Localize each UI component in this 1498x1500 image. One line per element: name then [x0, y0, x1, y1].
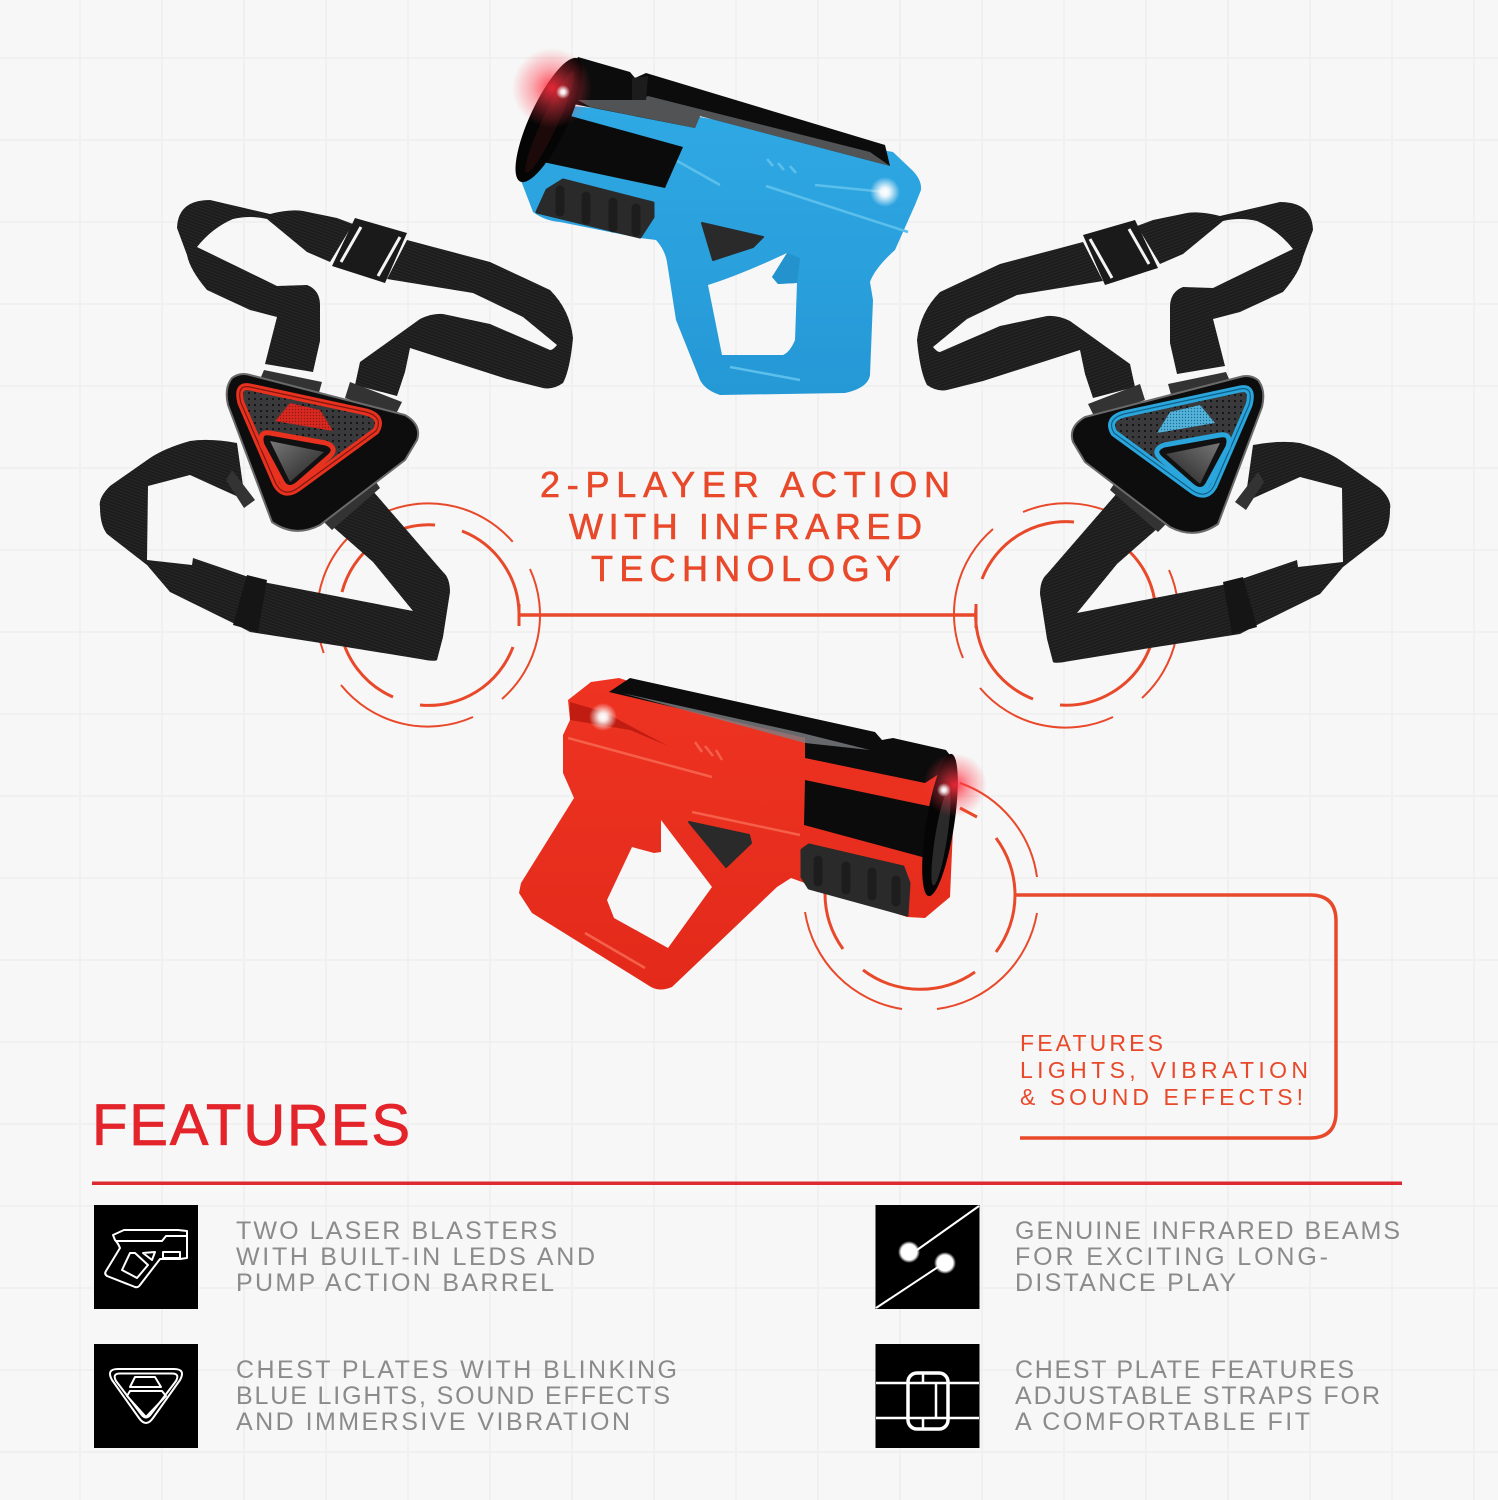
icon: chest plate — [94, 1344, 198, 1448]
right harness buckle — [1083, 220, 1158, 285]
blue LED glow — [870, 177, 900, 207]
headline: WITH INFRARED — [569, 506, 922, 547]
red laser blaster — [519, 678, 987, 990]
left plate grille — [275, 403, 333, 431]
feature 3 text — [1015, 1217, 1400, 1297]
left plate red ring — [240, 387, 378, 492]
feature 2 text: AND IMMERSIVE VIBRATION — [236, 1408, 630, 1436]
red gun shadow slot — [570, 702, 668, 746]
left harness buckle — [332, 218, 407, 283]
left plate button — [261, 433, 333, 488]
feature 2 text: BLUE LIGHTS, SOUND EFFECTS — [236, 1382, 670, 1410]
red gun top barrel — [609, 678, 956, 783]
left harness connectors — [226, 370, 402, 530]
right target rings — [954, 503, 1179, 728]
features divider — [92, 1182, 1402, 1185]
right chest harness (blue) — [917, 202, 1390, 663]
feature 3 text: GENUINE INFRARED BEAMS — [1015, 1217, 1400, 1245]
blue gun side button — [702, 223, 763, 260]
feature 4 text: A COMFORTABLE FIT — [1015, 1408, 1310, 1436]
left chest plate body — [227, 374, 418, 531]
blue laser blaster — [503, 48, 921, 395]
blue gun body — [520, 105, 921, 395]
callout text: LIGHTS, VIBRATION — [1020, 1057, 1308, 1083]
icon: blaster — [94, 1205, 198, 1309]
callout text — [1020, 1030, 1308, 1110]
gun target rings — [805, 783, 1037, 1009]
feature 4 text: CHEST PLATE FEATURES — [1015, 1356, 1354, 1384]
feature 2 text — [236, 1356, 677, 1436]
features heading: FEATURES — [92, 1093, 410, 1158]
callout text: & SOUND EFFECTS! — [1020, 1084, 1303, 1110]
feature 4 text: ADJUSTABLE STRAPS FOR — [1015, 1382, 1380, 1410]
headline: TECHNOLOGY — [591, 548, 900, 589]
feature 4 text — [1015, 1356, 1380, 1436]
red gun window — [804, 780, 933, 858]
red gun muzzle — [915, 752, 965, 898]
feature 1 text: WITH BUILT-IN LEDS AND — [236, 1243, 595, 1271]
connector line between harness rings — [519, 604, 976, 628]
feature 4 — [876, 1344, 1380, 1448]
red gun side button — [689, 822, 751, 867]
feature 1 — [94, 1205, 595, 1309]
red gun LED glow — [589, 703, 617, 731]
right harness slider — [1223, 577, 1257, 634]
feature 3 text: DISTANCE PLAY — [1015, 1269, 1236, 1297]
left harness slider — [233, 575, 267, 632]
headline — [540, 464, 950, 589]
feature 1 text: PUMP ACTION BARREL — [236, 1269, 554, 1297]
callout leader line — [1015, 895, 1336, 1138]
feature 2 text: CHEST PLATES WITH BLINKING — [236, 1356, 677, 1384]
left target rings — [317, 503, 540, 727]
blue gun muzzle — [503, 50, 595, 190]
feature 1 text — [236, 1217, 595, 1297]
right plate grille — [1157, 405, 1215, 433]
blue gun trigger shade — [772, 253, 800, 284]
right plate button — [1157, 435, 1229, 490]
icon: adjustable strap — [876, 1344, 980, 1448]
icon: infrared beams — [876, 1205, 980, 1309]
left harness straps — [100, 200, 573, 661]
right plate blue ring — [1112, 389, 1250, 494]
left chest harness (red) — [100, 200, 573, 661]
right harness straps — [917, 202, 1390, 663]
feature 1 text: TWO LASER BLASTERS — [236, 1217, 557, 1245]
right harness connectors — [1088, 372, 1264, 532]
headline: 2-PLAYER ACTION — [540, 464, 950, 505]
blue gun pump grip — [537, 180, 653, 237]
feature 2 — [94, 1344, 677, 1448]
feature 3 text: FOR EXCITING LONG- — [1015, 1243, 1328, 1271]
blue gun window — [543, 115, 683, 188]
muzzle red glow — [923, 753, 987, 817]
red gun body — [519, 678, 956, 990]
callout text: FEATURES — [1020, 1030, 1163, 1056]
blue gun top barrel — [556, 57, 890, 166]
muzzle red glow — [512, 48, 592, 128]
blue gun ridges — [672, 158, 908, 380]
right chest plate body — [1072, 376, 1263, 533]
feature 3 — [876, 1205, 1400, 1309]
red gun pump grip — [802, 845, 909, 915]
red gun ridges — [568, 738, 800, 968]
